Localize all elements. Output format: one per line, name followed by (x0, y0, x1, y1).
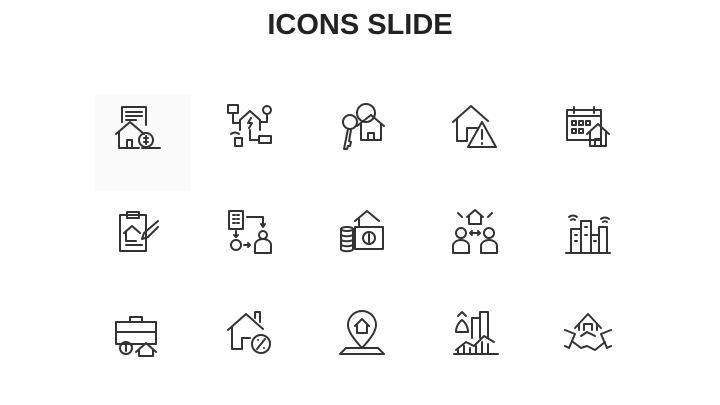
icon: smart buildings (565, 214, 611, 254)
icon: agents exchange house (452, 209, 498, 254)
icon: smart energy house (227, 104, 272, 147)
title: ICONS SLIDE (267, 9, 453, 41)
icon: clipboard contract (119, 211, 159, 252)
icon: money coins house (340, 210, 384, 252)
icon: key house (342, 103, 385, 150)
icon: briefcase house (115, 316, 157, 357)
icon: building to person (228, 210, 272, 254)
icon: calendar house (566, 106, 610, 147)
icon: house warning (452, 105, 497, 148)
icon: house document dollar (115, 106, 161, 149)
icon: money bag chart (453, 311, 499, 355)
icon: handshake house (564, 313, 612, 351)
icon: location pin house (339, 310, 385, 355)
icon: house percent (227, 311, 271, 354)
